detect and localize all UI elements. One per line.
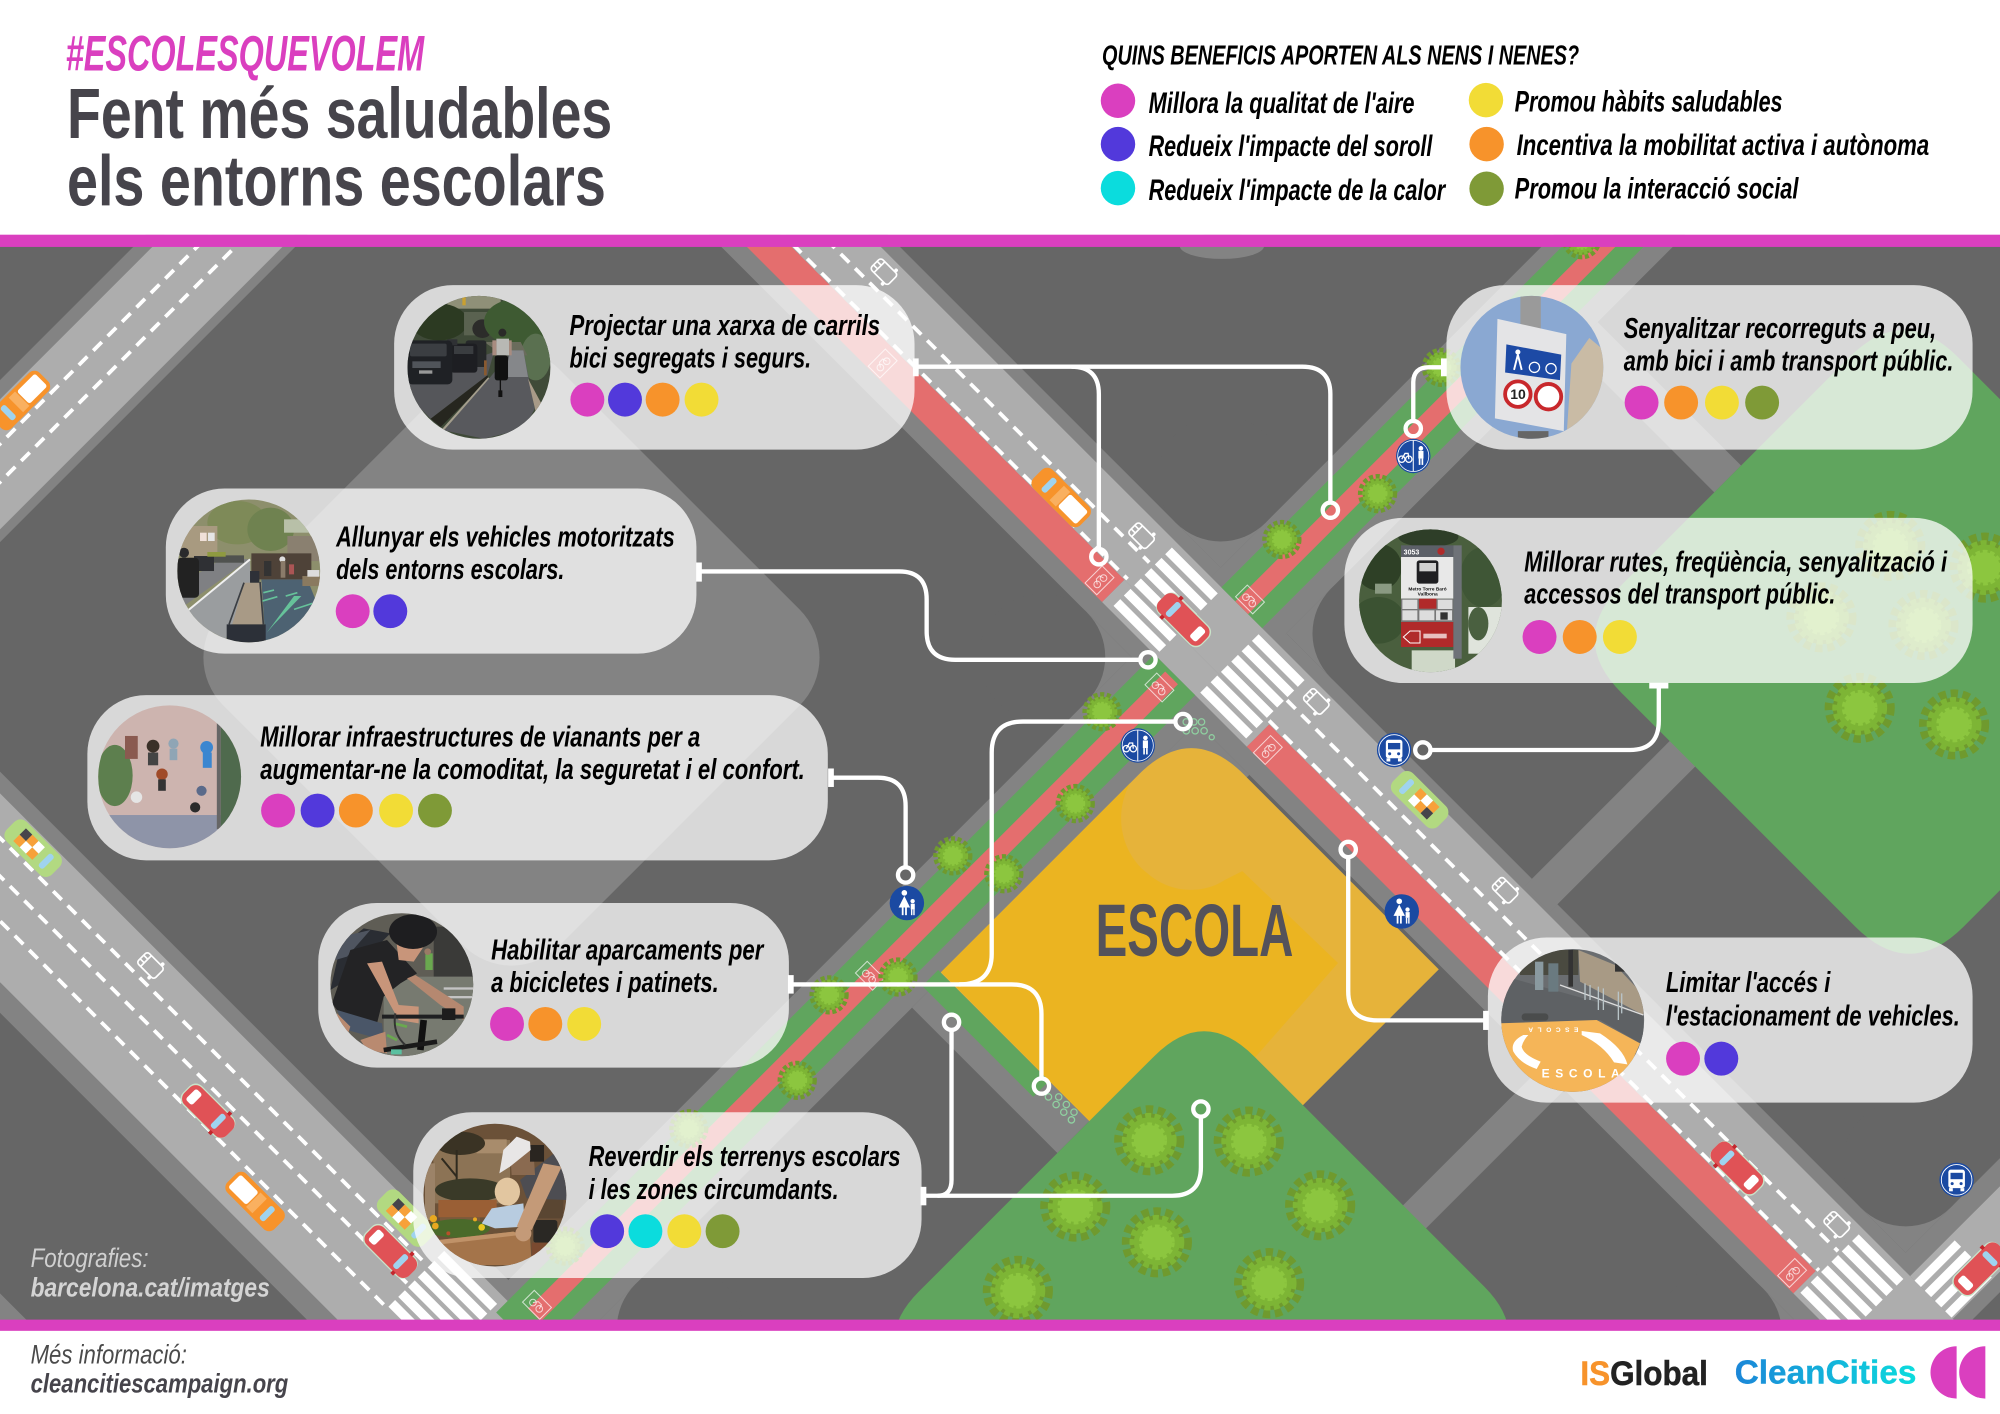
photo: planting with child [420,1120,570,1270]
panel: move vehicles away [166,489,696,654]
text: move vehicles away: Allunyar els vehicles motoritzats [335,522,675,554]
text: greening: i les zones circumdants. [589,1174,839,1206]
heading line 2: els entorns escolars [67,141,606,221]
text: bike parking: a bicicletes i patinets. [491,967,719,999]
photo: bus stop [1359,529,1502,672]
photo: boy on bike [327,910,477,1060]
title [66,26,612,221]
benefit dots [1523,620,1637,654]
legend heading: QUINS BENEFICIS APORTEN ALS NENS I NENES? [1102,39,1579,70]
icon: bus sign [1939,1163,1974,1197]
photo: street with fence [174,496,324,646]
icon: shared bike pedestrian sign [1396,439,1430,473]
text: bike parking: Habilitar aparcaments per [491,935,765,967]
header background [0,0,2000,235]
benefit dots [570,383,718,417]
footer information: cleancitiescampaign.org [31,1369,288,1399]
legend item: social [1469,172,1799,206]
connector: public transport [1415,686,1668,758]
photo: school road marking [1500,945,1650,1095]
legend [1101,39,1929,207]
text: signage [1624,313,1953,378]
panel: bike parking [318,903,789,1068]
photo: bus stop: Vallbona [1418,591,1438,596]
text: move vehicles away: dels entorns escolars. [336,554,564,586]
school label: ESCOLA [1096,889,1293,972]
benefit dots [261,794,452,828]
logo: Clean Cities mark [1930,1346,1985,1399]
text: bike lanes: Projectar una xarxa de carrils [570,310,880,342]
benefit dots [1666,1042,1738,1076]
connector: limit access [1341,842,1486,1030]
text: bike lanes [570,310,880,375]
connector: pedestrian infrastructure [831,768,913,883]
bottom magenta bar [0,1320,2000,1331]
text: public transport: accessos del transport públic. [1524,578,1835,610]
connector: bike parking [791,714,1191,1094]
text: greening [589,1141,901,1206]
text: pedestrian infrastructure: augmentar-ne la comoditat, la seguretat i el confort. [260,754,805,786]
legend item: habits: Promou hàbits saludables [1515,86,1783,119]
icon: shared bike pedestrian sign [1121,728,1155,763]
panel: bike lanes [394,285,915,450]
legend item: habits [1469,83,1783,119]
panel: greening [413,1112,922,1278]
benefit dots [490,1007,601,1041]
photo: school road marking: ESCOLA [1528,1026,1578,1033]
connector: greening [923,1015,1209,1205]
text: move vehicles away [335,522,675,586]
footer background [0,1330,2000,1414]
photo: scooter on bike lane [404,292,554,442]
photo credit: barcelona.cat/imatges [31,1272,270,1302]
text: limit access [1666,967,1960,1032]
icon: bus sign [1377,733,1411,767]
street trees [548,223,1598,1263]
photo: bus stop: Metro Torre Baró [1408,586,1447,591]
connector: move vehicles away [699,562,1156,667]
photo: school road marking: ESCOLA [1542,1067,1622,1081]
panel: public transport [1344,518,1973,683]
photo: bus stop: 3053 [1404,549,1419,556]
legend item: noise [1101,127,1433,163]
panel: pedestrian infrastructure [87,695,828,860]
photo: aerial pedestrians [97,704,244,851]
legend item: social: Promou la interacció social [1515,173,1799,206]
bike parking clusters [1045,719,1214,1123]
heading line 1: Fent més saludables [67,74,612,154]
text: greening: Reverdir els terrenys escolars [589,1141,901,1173]
logo: ISGlobal: ISGlobal [1580,1355,1708,1393]
text: pedestrian infrastructure: Millorar infraestructures de vianants per a [260,722,700,754]
school plot [941,722,1439,1220]
legend item: noise: Redueix l'impacte del soroll [1149,130,1433,163]
panel: signage [1446,285,1973,450]
photo credit [31,1243,270,1302]
icon: pedestrian sign [1385,894,1419,929]
photo: traffic sign [1459,295,1605,441]
road markings: bus and bike symbols [134,256,1853,1319]
connector: bike lanes [916,358,1338,564]
cars [0,368,2000,1302]
text: limit access: Limitar l'accés i [1666,967,1831,999]
panel: limit access [1488,937,1973,1103]
icon: pedestrian sign [890,886,924,920]
photo: traffic sign: 10 [1510,386,1526,402]
benefit dots [336,594,407,628]
logo: CleanCities: CleanCities [1735,1355,1916,1392]
connector: signage [1406,358,1444,436]
top magenta bar [0,235,2000,247]
benefit dots [590,1214,740,1248]
footer information: Més informació: [31,1339,187,1369]
legend item: heat [1101,171,1447,207]
legend item: air: Millora la qualitat de l'aire [1149,87,1415,120]
photo credit: Fotografies: [31,1243,149,1273]
text: bike lanes: bici segregats i segurs. [570,343,811,375]
parks [894,330,2000,1391]
footer information [31,1339,288,1399]
text: public transport [1524,546,1948,610]
park trees [988,516,2000,1321]
hashtag: #ESCOLESQUEVOLEM [66,26,425,82]
benefit dots [1625,386,1779,420]
legend item: air [1101,84,1415,120]
legend item: heat: Redueix l'impacte de la calor [1149,174,1447,207]
text: bike parking [491,935,765,999]
text: pedestrian infrastructure [260,722,805,786]
